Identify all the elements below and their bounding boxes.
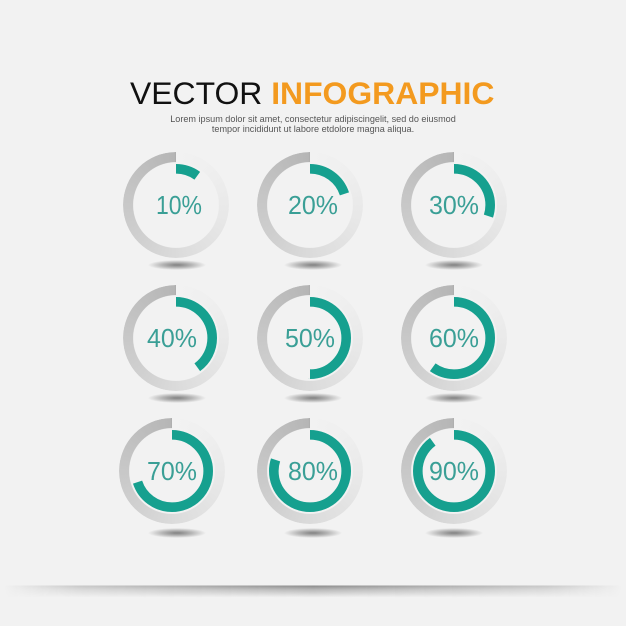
gauge: 20%	[257, 152, 362, 258]
shadow row 3 right	[425, 528, 483, 538]
shadow row 3 middle	[284, 528, 342, 538]
gauge: 60%: 60%	[429, 325, 479, 353]
gauge: 70%	[119, 418, 224, 524]
shadow row 1 middle	[284, 260, 342, 270]
gauge: 80%: 80%	[288, 458, 338, 486]
shadow row 1 left	[148, 260, 206, 270]
title: VECTOR INFOGRAPHIC	[130, 75, 494, 111]
gauge: 90%	[401, 418, 506, 524]
gauge: 70%: 70%	[146, 458, 196, 486]
gauge: 10%	[123, 152, 228, 258]
gauge: 50%: 50%	[285, 325, 335, 353]
gauge: 10%: 10%	[156, 192, 202, 220]
shadow row 1 right	[425, 260, 483, 270]
gauge: 80%	[257, 418, 362, 524]
subtitle text: Lorem ipsum dolor sit amet, consectetur adipiscingelit, sed do eiusmod	[170, 114, 456, 124]
gauge: 40%: 40%	[146, 325, 196, 353]
gauge: 60%	[401, 285, 506, 391]
subtitle text	[170, 114, 456, 134]
gauge: 20%: 20%	[288, 192, 338, 220]
gauge: 30%	[401, 152, 506, 258]
gauge: 90%: 90%	[429, 458, 479, 486]
subtitle text: tempor incididunt ut labore etdolore magna aliqua.	[212, 124, 414, 134]
gauge: 40%	[123, 285, 228, 391]
gauge: 50%	[257, 285, 362, 391]
bottom panel shadow	[19, 586, 607, 596]
shadow row 3 left	[148, 528, 206, 538]
shadow row 2 left	[148, 393, 206, 403]
shadow row 2 right	[425, 393, 483, 403]
gauge: 30%: 30%	[429, 192, 479, 220]
shadow row 2 middle	[284, 393, 342, 403]
